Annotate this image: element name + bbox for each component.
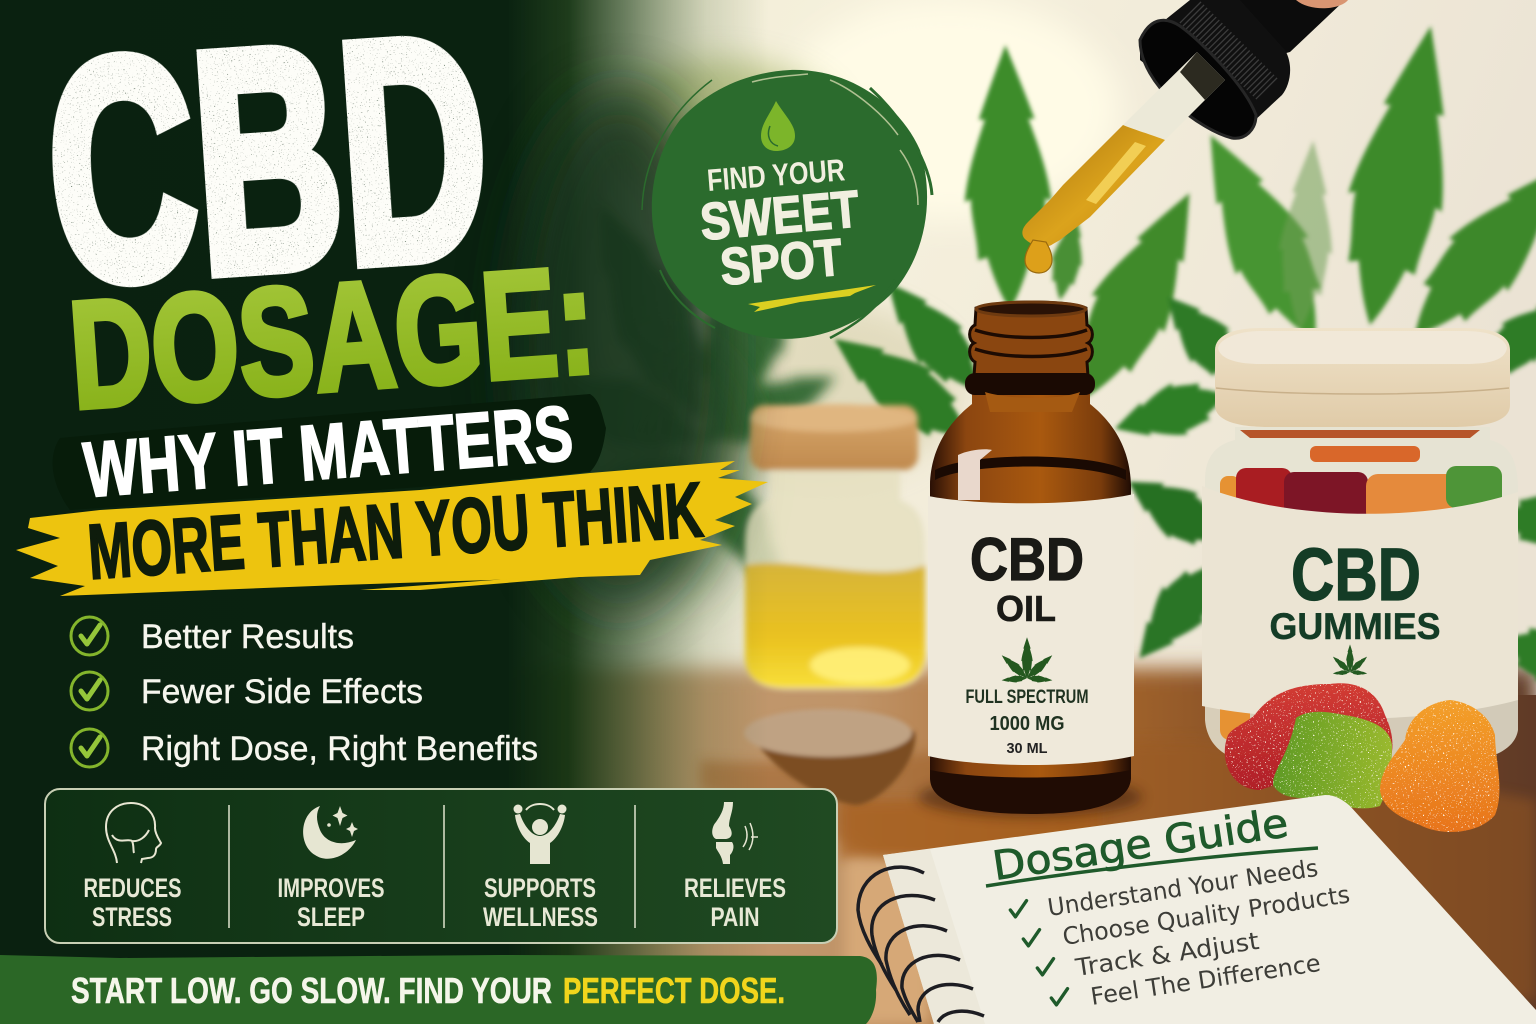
label: improves sleep: SLEEP — [297, 902, 365, 932]
label: reduces stress: STRESS — [92, 902, 172, 932]
notebook check marks — [1010, 901, 1068, 1005]
notebook: dosage guide — [858, 795, 1536, 1024]
notebook list: Understand Your Needs — [1046, 854, 1320, 922]
bottle: CBD oil: CBD — [970, 526, 1084, 593]
benefits checklist — [71, 617, 538, 768]
finger — [1296, 0, 1348, 8]
item: fewer side effects: Fewer Side Effects — [141, 673, 423, 711]
bottle: CBD oil: FULL SPECTRUM — [966, 687, 1088, 708]
label: supports wellness: WELLNESS — [483, 902, 598, 932]
bottom slogan strip: PERFECT DOSE. — [563, 970, 785, 1011]
dropper with oil — [1022, 0, 1348, 273]
jar label — [1202, 486, 1518, 719]
label: supports wellness — [483, 873, 598, 932]
ribbed cap — [1140, 0, 1290, 136]
gummies inside jar — [1220, 430, 1502, 740]
label: improves sleep — [278, 873, 384, 932]
bottom slogan strip — [0, 955, 877, 1024]
subtitle: yellow brush banner — [16, 461, 768, 596]
cap opening — [1140, 20, 1256, 138]
notebook list: Feel The Difference — [1089, 949, 1322, 1011]
title: DOSAGE:: DOSAGE: — [64, 235, 600, 441]
notebook list — [1046, 854, 1352, 1011]
icon: drop — [761, 101, 795, 151]
background hemp leaves — [816, 17, 1536, 701]
jar lid — [1215, 328, 1510, 427]
bottle: CBD oil: 1000 MG — [990, 713, 1064, 735]
panel: benefits icons — [45, 789, 837, 943]
icon: person with raised arms — [514, 804, 566, 864]
item: better results: Better Results — [141, 618, 354, 656]
icon: hemp leaf — [1331, 644, 1369, 676]
oil in tube — [1022, 125, 1165, 247]
badge: find your sweet spot: FIND YOUR — [706, 152, 846, 198]
label: improves sleep: IMPROVES — [278, 873, 384, 903]
label: relieves pain: RELIEVES — [684, 873, 786, 903]
bottle: CBD oil — [918, 302, 1142, 817]
black stem — [1235, 0, 1345, 60]
notebook list: Choose Quality Products — [1061, 880, 1352, 951]
jar: CBD gummies — [1202, 328, 1518, 832]
loose gummies — [1225, 683, 1499, 832]
icon: hemp leaf — [999, 637, 1055, 684]
jar: CBD gummies: CBD — [1291, 533, 1421, 616]
label: supports wellness: SUPPORTS — [484, 873, 596, 903]
notebook list: Track & Adjust — [1073, 927, 1261, 982]
label: relieves pain: PAIN — [710, 902, 760, 932]
jar: CBD gummies: GUMMIES — [1270, 606, 1440, 647]
badge: find your sweet spot: SWEET — [698, 180, 862, 252]
subtitle: why it matters — [53, 389, 606, 514]
bottom slogan strip: START LOW. GO SLOW. FIND YOUR — [71, 970, 552, 1011]
blurred glass jar with oil — [745, 404, 925, 690]
blurred leaves behind the title — [519, 185, 848, 605]
wooden dish — [744, 709, 915, 805]
label: reduces stress — [84, 873, 182, 932]
badge: find your sweet spot: SPOT — [718, 229, 845, 297]
spiral binding — [858, 867, 984, 1022]
subtitle: why it matters: WHY IT MATTERS — [81, 389, 576, 514]
icon: moon and stars — [303, 806, 358, 859]
oil drop — [1025, 240, 1052, 273]
badge: find your sweet spot — [642, 70, 932, 339]
subtitle: yellow brush banner: MORE THAN YOU THINK — [85, 465, 706, 596]
icon: knee joint — [712, 802, 758, 864]
bottle: CBD oil: OIL — [996, 588, 1056, 629]
bottle: CBD oil: 30 ML — [1006, 741, 1048, 757]
glass tube — [1123, 52, 1225, 140]
label: relieves pain — [684, 873, 786, 932]
bottle label — [928, 494, 1134, 765]
item: right dose: Right Dose, Right Benefits — [141, 730, 538, 768]
icon: head with brain — [106, 803, 161, 863]
label: reduces stress: REDUCES — [84, 873, 182, 903]
notebook heading: Dosage Guide — [990, 800, 1291, 890]
